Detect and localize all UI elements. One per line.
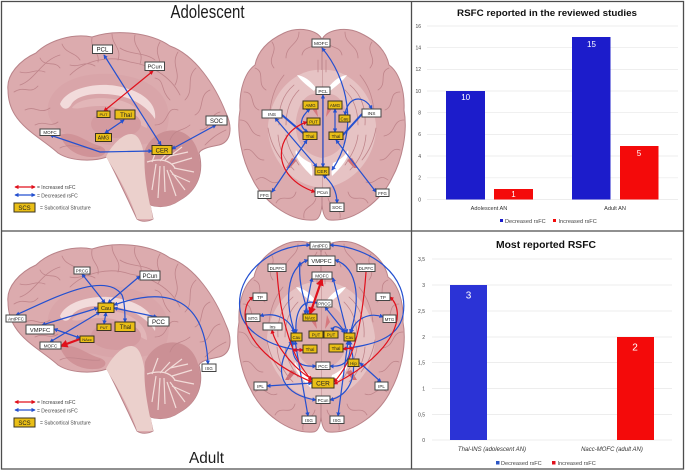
title: Adult: Adult <box>189 450 225 467</box>
node: PCun <box>315 188 330 196</box>
node: SOC <box>330 203 344 212</box>
node: PUT <box>307 118 320 125</box>
panel: most reported RSFC bar chart <box>418 240 672 467</box>
node: MTG left: MTG <box>248 316 258 321</box>
legend <box>500 219 597 225</box>
node: INS right <box>362 109 381 117</box>
bar: adolescent decreased 10: 10 <box>461 93 471 102</box>
node: DLPFC right <box>357 264 375 272</box>
node: PUT: PUT <box>100 325 109 330</box>
node: PRCG: PRCG <box>318 302 331 306</box>
node: Thal <box>115 322 135 332</box>
legend: Increased rsFC <box>558 461 596 467</box>
node: AntPFC: AntPFC <box>8 316 25 321</box>
node: FFG left: FFG <box>260 193 269 198</box>
node: IPL right: IPL <box>378 384 385 389</box>
node: AMG right <box>328 101 342 109</box>
node: Cau: Cau <box>101 306 111 312</box>
node: ISG left <box>302 416 316 424</box>
node: IPL right <box>375 382 388 390</box>
y axis labels: 3 <box>422 283 425 289</box>
x axis labels: Adult AN <box>604 206 626 212</box>
node: PUT <box>97 324 111 330</box>
node: NAcc: NAcc <box>305 316 316 320</box>
node: MOFC: MOFC <box>315 274 329 278</box>
node: PCun <box>145 62 164 71</box>
bar: Thal-INS 3 <box>450 285 487 440</box>
node: VMPFC: VMPFC <box>30 328 50 334</box>
legend: adolescent sagittal: = Increased rsFC <box>37 185 76 191</box>
node: CER: CER <box>317 169 328 175</box>
node: Thal <box>115 110 135 119</box>
y axis labels: 1,5 <box>418 360 425 366</box>
legend <box>496 461 596 467</box>
node: Thal: Thal <box>120 325 131 331</box>
node: NAcc: NAcc <box>82 337 92 342</box>
node: AMG: AMG <box>98 136 109 142</box>
node: AntPFC: AntPFC <box>312 244 329 248</box>
node: Thal: Thal <box>120 113 132 119</box>
bar: adolescent increased 1 <box>494 189 533 200</box>
bar: Thal-INS 3: 3 <box>466 290 472 302</box>
legend: adult sagittal <box>14 400 91 427</box>
bar: adolescent decreased 10 <box>446 91 485 200</box>
node: PCC <box>316 362 330 370</box>
legend: adult sagittal: SCS <box>18 421 31 427</box>
node: Thal right: Thal <box>332 346 340 351</box>
arrows: adolescent sagittal connections <box>50 55 216 152</box>
node: PRCG <box>317 300 332 307</box>
node: PUT: PUT <box>100 112 108 117</box>
node: PCL: PCL <box>318 89 328 95</box>
bar: adult decreased 15 <box>572 37 610 200</box>
node: PCC: PCC <box>152 319 166 326</box>
y axis labels: 3,5 <box>418 257 425 263</box>
node: Cau <box>339 115 350 122</box>
panel: adolescent axial view <box>239 29 405 220</box>
node: VMPFC: VMPFC <box>311 259 332 265</box>
legend: adolescent sagittal <box>14 185 91 212</box>
node: Hip: Hip <box>350 361 357 366</box>
node: NAcc <box>303 314 317 321</box>
node: SOC: SOC <box>210 119 224 125</box>
node: Ins: Ins <box>269 324 276 330</box>
panel: adolescent sagittal view <box>8 2 245 221</box>
y axis labels: 0 <box>418 197 421 203</box>
bar: adult increased 5 <box>620 146 658 200</box>
brain: adolescent sagittal <box>8 33 230 221</box>
y axis labels: 10 <box>415 89 421 95</box>
arrows: adult sagittal connections <box>16 274 208 364</box>
node: PCL: PCL <box>97 48 109 54</box>
node: ISG right: ISG <box>333 418 341 423</box>
node: SOC <box>206 116 227 125</box>
y axis labels: 0,5 <box>418 412 425 418</box>
node: Hip <box>348 359 359 366</box>
node: PUT right: PUT <box>327 332 336 338</box>
panel: adult axial view <box>238 241 404 432</box>
y axis labels: 16 <box>415 24 421 30</box>
node: FFG left <box>258 191 271 198</box>
y axis labels: 6 <box>418 132 421 138</box>
node: CER <box>315 167 329 175</box>
node: CER: CER <box>316 381 330 388</box>
node: AMG right: AMG <box>330 103 341 108</box>
node: ISG right <box>330 416 344 424</box>
node: Cau right <box>344 333 355 341</box>
node: INS right: INS <box>368 111 376 117</box>
node: MOFC <box>312 39 330 47</box>
node: Thal right <box>329 132 343 140</box>
node: PCun: PCun <box>147 65 162 71</box>
legend: adult sagittal: = Increased rsFC <box>37 400 76 406</box>
node: TP left <box>253 293 267 300</box>
chart title: RSFC reported in the reviewed studies <box>457 8 637 19</box>
x axis labels: Nacc-MOFC (adult AN) <box>581 447 643 453</box>
node: Cau right: Cau <box>346 335 354 340</box>
node: MOFC <box>312 272 332 279</box>
node: Cau: Cau <box>341 116 349 122</box>
brain: adult axial <box>238 241 404 432</box>
arrows: adult axial connections <box>240 245 404 416</box>
node: Thal left <box>303 345 317 353</box>
legend: adolescent sagittal: SCS <box>18 206 31 212</box>
node: INS left <box>262 110 282 118</box>
y axis labels: 2,5 <box>418 309 425 315</box>
node: ISG left: ISG <box>305 418 313 423</box>
node: MOFC: MOFC <box>43 130 57 135</box>
node: PCC <box>148 317 169 326</box>
node: MOFC <box>40 342 61 349</box>
node: IPL left: IPL <box>257 384 264 389</box>
node: ISG <box>202 364 216 372</box>
node: AntPFC <box>310 242 330 249</box>
node: MOFC: MOFC <box>314 41 329 47</box>
node: VMPFC <box>26 325 54 334</box>
node: PCun: PCun <box>318 398 329 403</box>
node: MTG right: MTG <box>385 317 395 322</box>
node: PCun <box>316 396 330 404</box>
node: AntPFC <box>6 315 26 322</box>
brain: adult sagittal <box>8 245 230 433</box>
y axis labels: 8 <box>418 110 421 116</box>
node: CER <box>152 146 172 154</box>
node: MTG left <box>246 314 260 322</box>
legend: adolescent sagittal: = Subcortical Structure <box>40 206 91 212</box>
node: PCun <box>140 271 160 280</box>
node: AMG left: AMG <box>305 103 316 108</box>
legend: adolescent sagittal: = Decreased rsFC <box>37 194 78 200</box>
node: PRCG <box>74 267 90 274</box>
node: PUT left <box>309 331 323 338</box>
legend: adult sagittal: = Decreased rsFC <box>37 408 78 414</box>
node: PUT right <box>324 331 338 338</box>
node: TP left: TP <box>257 295 263 300</box>
node: Cau left: Cau <box>293 335 301 340</box>
node: AMG left <box>303 101 318 109</box>
node: AMG <box>96 134 112 142</box>
node: CER <box>312 378 334 388</box>
node: PUT left: PUT <box>312 332 321 338</box>
legend: Increased rsFC <box>558 219 597 225</box>
node: IPL left <box>254 382 267 390</box>
node: Ins <box>263 323 282 330</box>
title: Adolescent: Adolescent <box>170 2 244 22</box>
bar: adult increased 5: 5 <box>637 149 642 158</box>
node: Cau left <box>291 333 302 341</box>
node: MOFC: MOFC <box>44 344 58 348</box>
bar: Nacc-MOFC 2: 2 <box>632 342 638 354</box>
y axis labels <box>415 24 421 203</box>
node: Thal left: Thal <box>306 134 314 139</box>
node: DLPFC left: DLPFC <box>270 266 285 271</box>
y axis labels: 0 <box>422 438 425 444</box>
legend: Decreased rsFC <box>501 461 542 467</box>
node: MTG right <box>383 315 396 322</box>
node: Cau <box>98 303 114 312</box>
arrows: adolescent axial connections <box>272 48 376 203</box>
x axis labels: Adolescent AN <box>471 206 507 212</box>
node: DLPFC right: DLPFC <box>359 266 374 271</box>
legend: Decreased rsFC <box>505 219 546 225</box>
x axis labels <box>458 447 643 453</box>
x axis labels: Thal-INS (adolescent AN) <box>458 447 526 453</box>
node: PUT <box>97 111 110 118</box>
node: Thal left <box>303 132 317 140</box>
node: PRCG: PRCG <box>76 268 89 274</box>
node: FFG right <box>376 189 389 196</box>
node: Thal left: Thal <box>306 347 314 352</box>
y axis labels: 1 <box>422 386 425 392</box>
chart title: Most reported RSFC <box>496 240 596 251</box>
node: CER: CER <box>156 148 169 154</box>
node: Thal right: Thal <box>332 134 340 139</box>
node: NAcc <box>80 336 94 342</box>
y axis labels: 2 <box>418 176 421 182</box>
node: MOFC <box>40 129 60 136</box>
node: PCL <box>92 45 112 54</box>
panel: adult sagittal view <box>6 245 230 467</box>
x axis labels <box>471 206 626 212</box>
node: DLPFC left <box>268 264 286 272</box>
node: PCL <box>316 87 330 95</box>
panel: RSFC reported bar chart <box>415 8 678 225</box>
bar: adolescent increased 1: 1 <box>511 190 516 199</box>
y axis labels <box>418 257 425 444</box>
node: ISG: ISG <box>205 366 213 371</box>
legend: adult sagittal: = Subcortical Structure <box>40 420 91 426</box>
node: SOC: SOC <box>332 205 343 210</box>
node: PCC: PCC <box>318 364 328 369</box>
node: FFG right: FFG <box>378 191 387 196</box>
node: PCun: PCun <box>142 274 158 280</box>
y axis labels: 14 <box>415 46 421 52</box>
y axis labels: 12 <box>415 67 421 73</box>
bar: adult decreased 15: 15 <box>587 40 596 49</box>
node: PCun: PCun <box>317 190 328 195</box>
node: INS left: INS <box>268 112 276 118</box>
node: TP right: TP <box>380 295 386 300</box>
node: TP right <box>376 293 390 300</box>
y axis labels: 2 <box>422 335 425 341</box>
y axis labels: 4 <box>418 154 421 160</box>
node: VMPFC <box>308 256 335 266</box>
node: Thal right <box>329 344 343 352</box>
bar: Nacc-MOFC 2 <box>617 337 654 440</box>
node: PUT: PUT <box>309 119 318 124</box>
brain: adolescent axial <box>239 29 405 220</box>
